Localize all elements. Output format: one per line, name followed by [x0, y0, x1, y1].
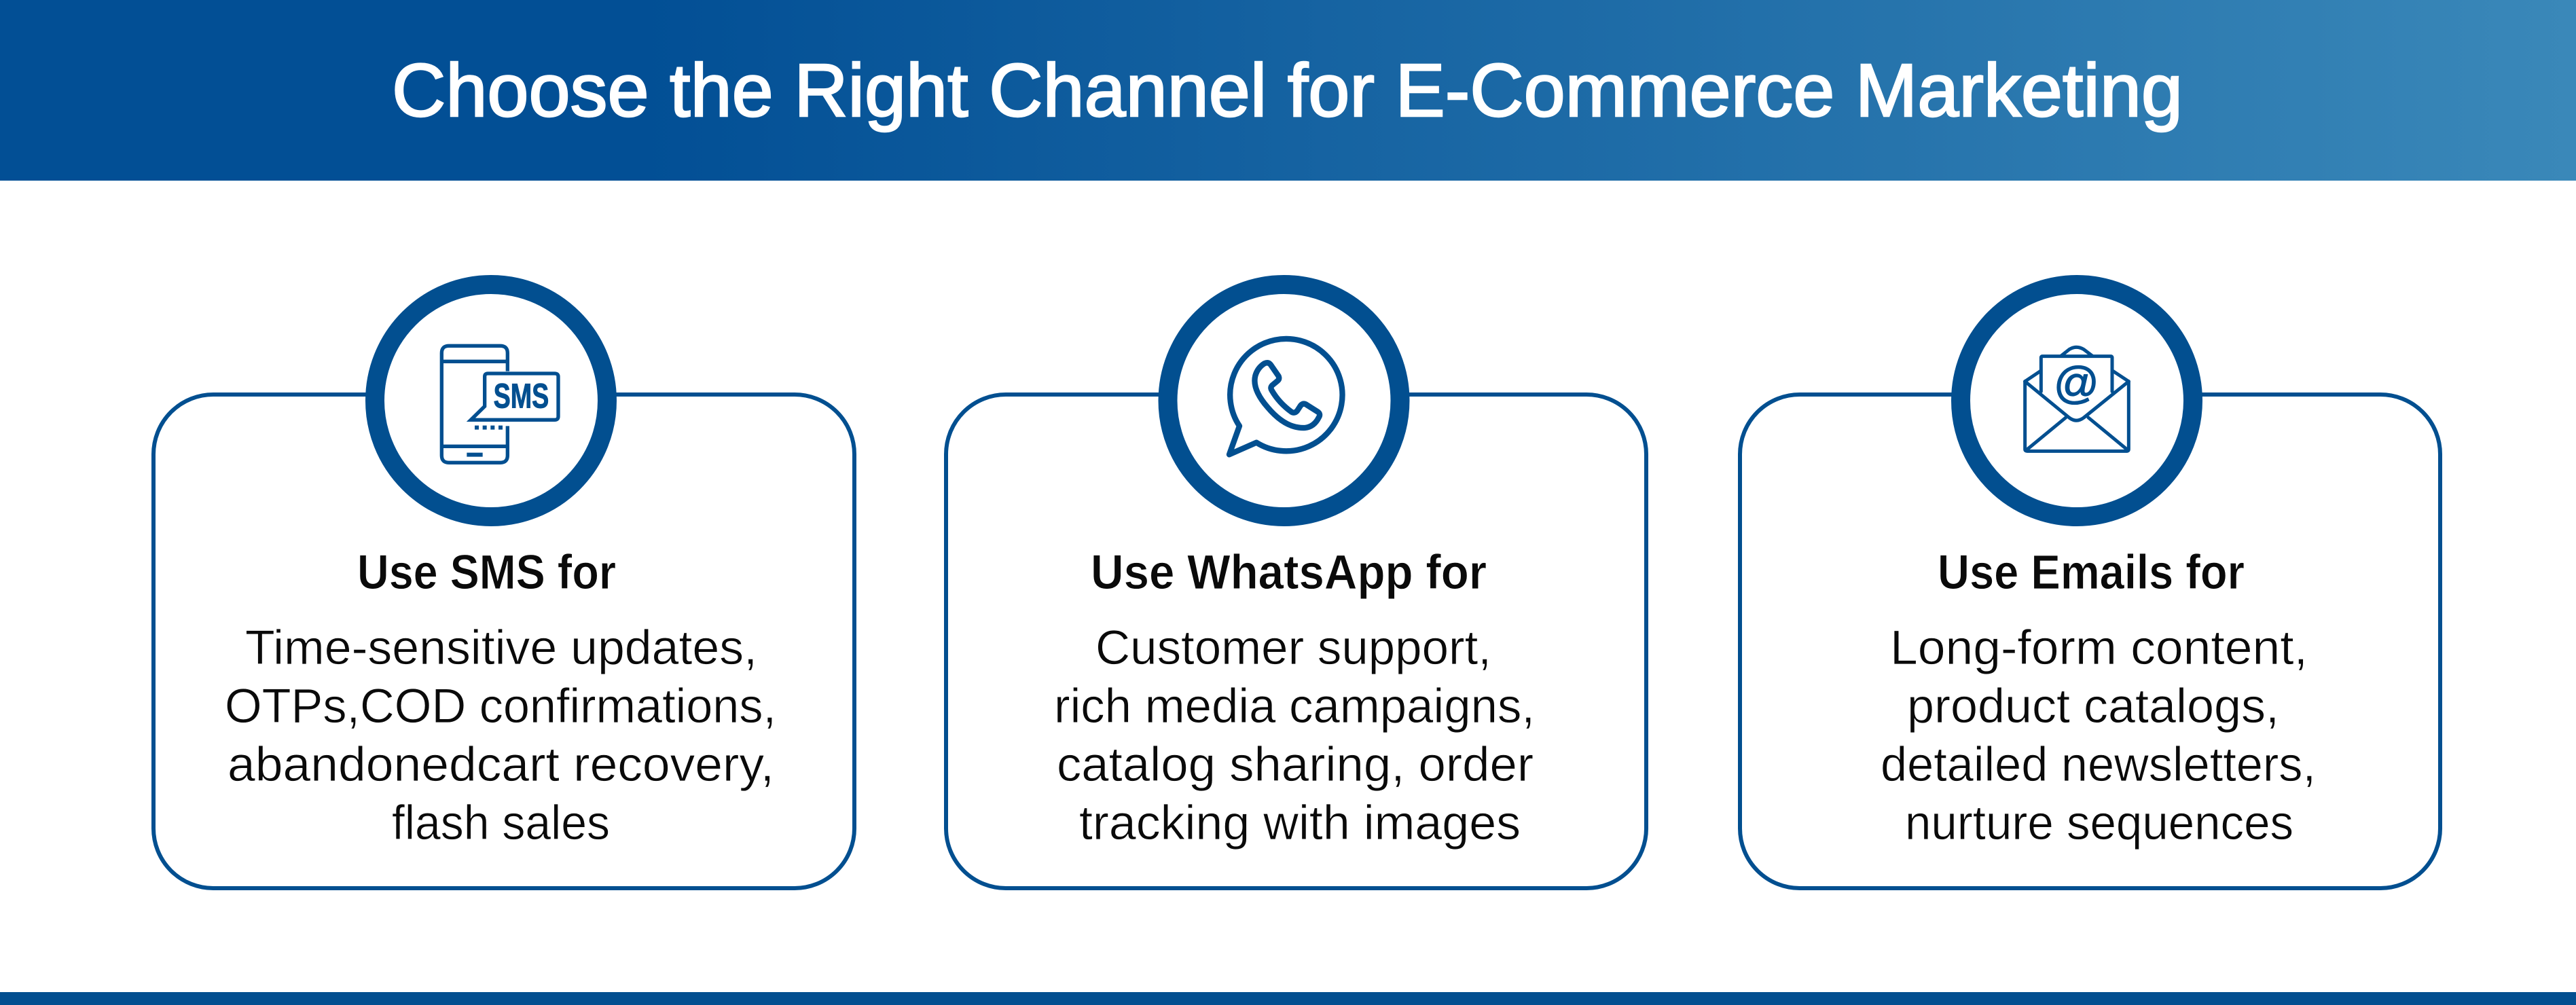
- body text: WhatsApp: tracking with images: [1079, 797, 1521, 850]
- icon ring: Emails: [1961, 285, 2193, 517]
- body text: Emails: [1881, 621, 2316, 850]
- body text: WhatsApp: rich media campaigns,: [1054, 680, 1535, 733]
- body text: SMS: abandonedcart recovery,: [228, 738, 774, 792]
- icon ring: SMS: [375, 285, 607, 517]
- body text: WhatsApp: [1054, 621, 1535, 850]
- panel: WhatsApp: [946, 285, 1646, 888]
- heading: WhatsApp: Use WhatsApp for: [1091, 546, 1487, 600]
- panel: SMS: [153, 285, 854, 888]
- body text: Emails: product catalogs,: [1907, 680, 2279, 733]
- body text: Emails: nurture sequences: [1905, 797, 2293, 850]
- body text: SMS: Time-sensitive updates,: [245, 621, 757, 675]
- card outline: Emails: [1740, 395, 2440, 888]
- card outline: WhatsApp: [946, 395, 1646, 888]
- title: Choose the Right Channel for E-Commerce Marketing: [392, 49, 2183, 132]
- icon: phone with SMS bubble: [441, 346, 558, 462]
- icon: phone with SMS bubble: SMS: [494, 377, 549, 416]
- icon: WhatsApp bubble with handset: [1229, 339, 1343, 454]
- body text: SMS: [225, 621, 776, 850]
- icon: open envelope with at sign: [2025, 347, 2128, 451]
- card outline: SMS: [153, 395, 854, 888]
- icon ring: WhatsApp: [1168, 285, 1400, 517]
- icon: open envelope with at sign: @: [2054, 358, 2099, 408]
- body text: Emails: Long-form content,: [1890, 621, 2308, 675]
- body text: SMS: flash sales: [392, 797, 610, 850]
- body text: WhatsApp: Customer support,: [1095, 621, 1491, 675]
- body text: SMS: OTPs,COD confirmations,: [225, 680, 776, 733]
- header banner: [0, 0, 2576, 181]
- body text: WhatsApp: catalog sharing, order: [1057, 738, 1534, 792]
- body text: Emails: detailed newsletters,: [1881, 738, 2316, 792]
- heading: Emails: Use Emails for: [1938, 546, 2245, 600]
- panel: Emails: [1740, 285, 2440, 888]
- heading: SMS: Use SMS for: [357, 546, 616, 600]
- footer band: [0, 992, 2576, 1005]
